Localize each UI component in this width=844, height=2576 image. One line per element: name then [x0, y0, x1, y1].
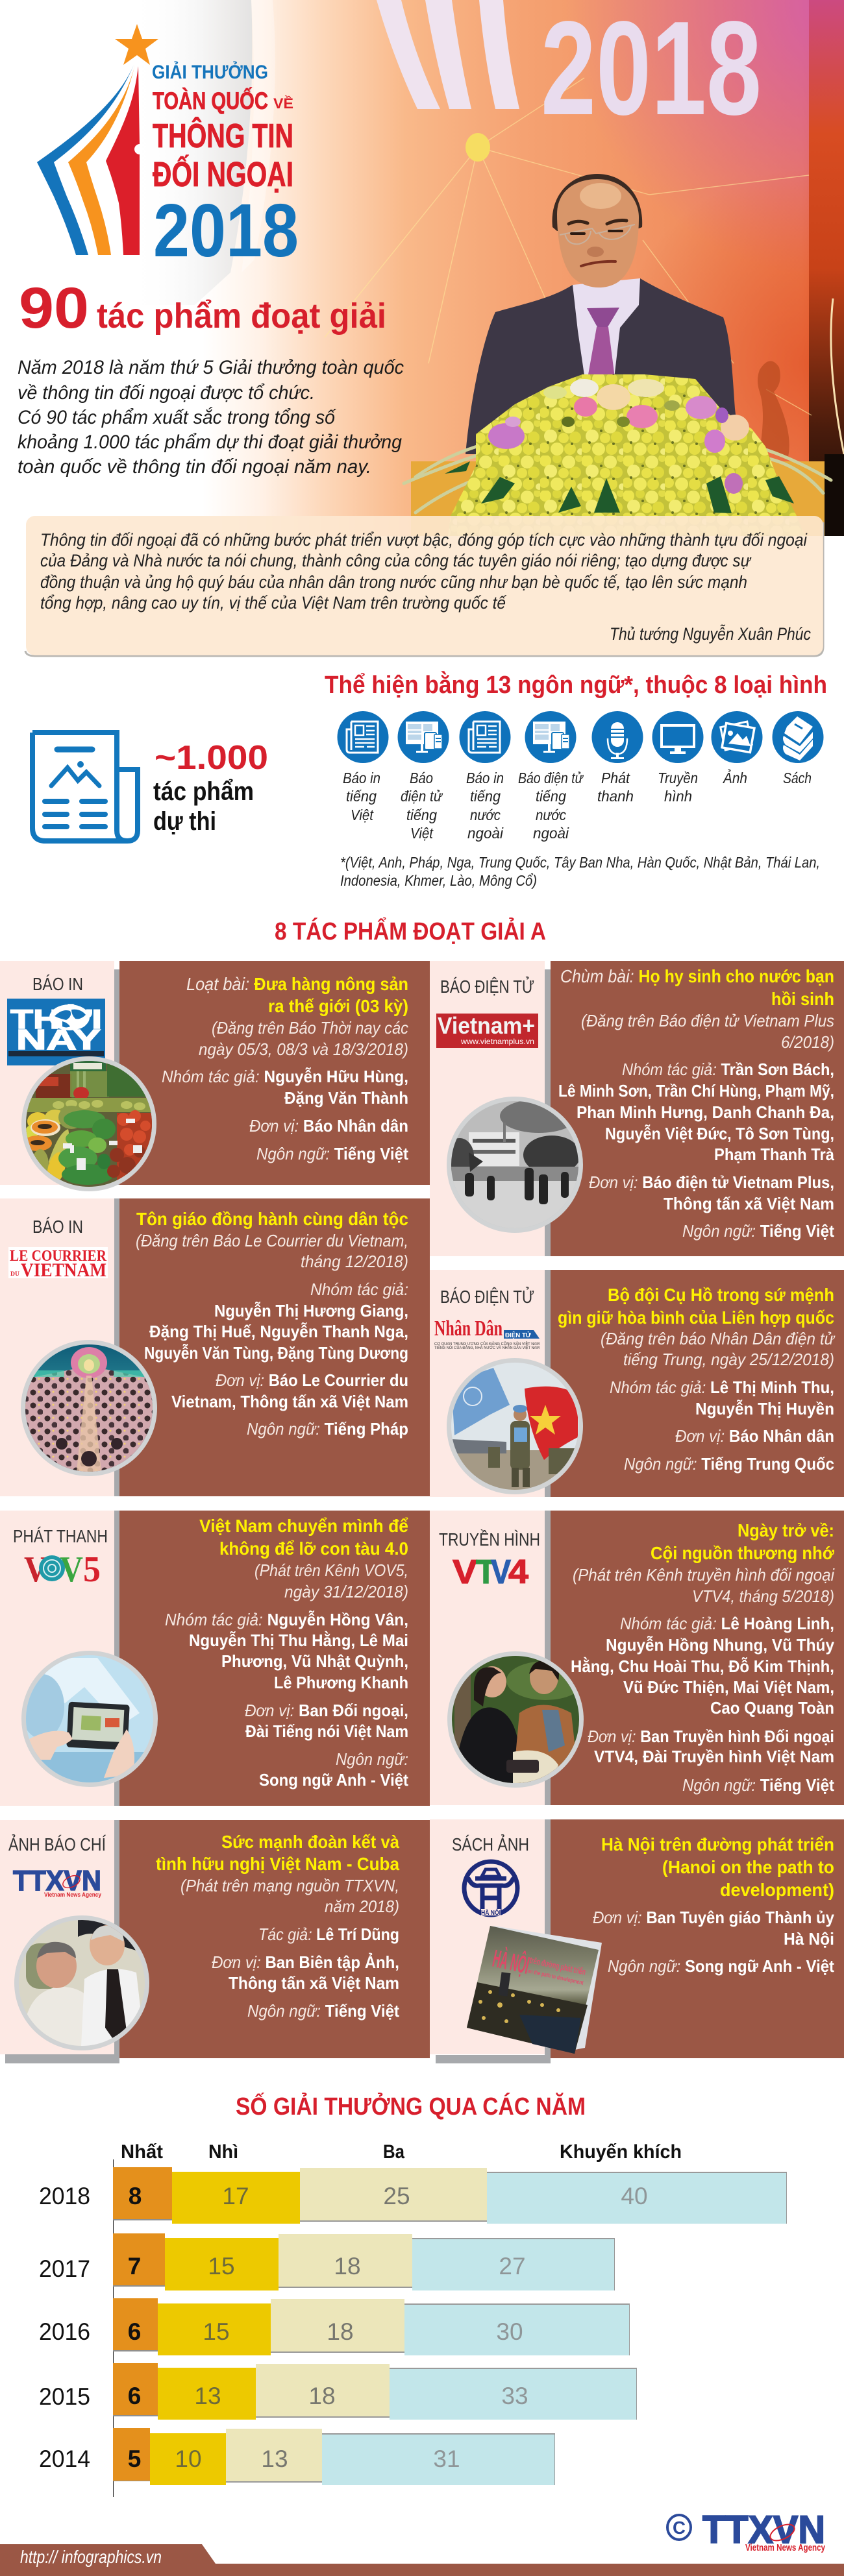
chart column headers: Nhì — [208, 2141, 238, 2163]
icon labels: tiếng — [346, 788, 377, 805]
publication note: ngày 05/3, 08/3 và 18/3/2018) — [199, 1039, 408, 1059]
logo: TTXVN: Vietnam News Agency — [44, 1891, 101, 1898]
logo: VOV5: V — [24, 1549, 47, 1590]
logo: Vietnam Plus: www.vietnamplus.vn — [460, 1037, 534, 1046]
row: 2014: 13 — [261, 2446, 288, 2472]
unit — [589, 1173, 834, 1213]
stat: about 1000 entries — [153, 739, 268, 836]
headline: 90 works: tác phẩm đoạt giải — [97, 297, 386, 335]
row: 2016: 2016 — [39, 2318, 90, 2345]
category label: TRUYỀN HÌNH — [439, 1529, 540, 1549]
row: 2014 — [39, 2428, 555, 2485]
logo: Thoi Nay — [7, 999, 105, 1065]
heading: Loạt bài: Đưa hàng nông sản — [186, 974, 408, 994]
logo: VOV5: V — [60, 1549, 83, 1590]
icon row: media types — [338, 711, 823, 763]
publication note — [180, 1876, 399, 1916]
publication note: (Phát trên mạng nguồn TTXVN, — [180, 1876, 399, 1895]
photo: tablet and robot arm — [20, 1651, 158, 1787]
icon: microphone — [592, 711, 643, 763]
authors: Phương, Vũ Nhật Quỳnh, — [221, 1651, 408, 1671]
authors — [610, 1378, 834, 1418]
row: 2016 — [39, 2298, 630, 2355]
logo title text: TOÀN QUỐC — [153, 87, 268, 114]
category label: BÁO ĐIỆN TỬ — [440, 976, 534, 997]
publication note: 6/2018) — [781, 1032, 834, 1052]
icon: books — [773, 711, 823, 763]
authors — [165, 1610, 408, 1692]
photo: two leaders — [14, 1915, 149, 2050]
row: 2017: 7 — [128, 2253, 141, 2279]
icon: online newspaper — [397, 711, 449, 763]
authors: Nguyễn Thị Hương Giang, — [214, 1301, 408, 1320]
unit — [212, 1952, 399, 1993]
category label: BÁO IN — [32, 1217, 83, 1237]
language — [259, 1749, 408, 1790]
photo: television interview — [447, 1651, 584, 1788]
publication note — [136, 1231, 408, 1271]
publication note — [199, 1018, 408, 1059]
icon labels: Việt — [351, 807, 374, 823]
icon labels: Phát — [601, 770, 630, 786]
icon labels: Báo — [410, 770, 433, 786]
icon labels: thanh — [597, 788, 634, 805]
publication note: năm 2018) — [325, 1897, 399, 1916]
icon: star — [115, 24, 158, 65]
logo: VTV4: V — [453, 1553, 477, 1591]
icon: print newspaper — [338, 711, 388, 763]
image: book cover — [467, 1926, 602, 2054]
icon labels: Sách — [783, 770, 812, 786]
quote text — [40, 530, 808, 613]
publication note — [254, 1561, 408, 1601]
icon: photos — [712, 711, 762, 763]
intro paragraph: khoảng 1.000 tác phẩm dự thi đoạt giải thưởng — [18, 431, 402, 453]
unit: VTV4, Đài Truyền hình Việt Nam — [594, 1747, 834, 1766]
heading: Ngày trở về: — [738, 1520, 834, 1540]
publication note: ngày 31/12/2018) — [284, 1582, 408, 1601]
logo: VOV5 — [24, 1549, 101, 1590]
logo: Nhan Dan: ĐIỆN TỬ — [505, 1331, 532, 1339]
language: Ngôn ngữ: Tiếng Việt — [256, 1144, 408, 1163]
category label: SÁCH ẢNH — [452, 1834, 529, 1854]
logo: Vietnam Plus: Vietnam+ — [438, 1012, 535, 1039]
chart column headers: Khuyến khích — [560, 2141, 682, 2163]
icon: newspaper — [32, 733, 138, 841]
panel: television, VTV4 — [430, 1511, 844, 1805]
authors: Đặng Văn Thành — [284, 1088, 408, 1108]
icon labels: Báo in — [466, 770, 504, 786]
logo title text: 2018 — [153, 188, 299, 273]
panel: online, Vietnam Plus — [430, 961, 844, 1256]
authors: Nguyễn Thị Huyền — [695, 1399, 834, 1418]
icon labels — [343, 768, 812, 842]
logo: Le Courrier du Vietnam — [8, 1247, 108, 1281]
panel: photo book, Hanoi — [430, 1819, 844, 2063]
footer logo: TTXVN: TTXVN — [702, 2508, 825, 2551]
unit: Thông tấn xã Việt Nam — [664, 1194, 834, 1213]
authors: Nhóm tác giả: Nguyễn Hữu Hùng, — [162, 1067, 408, 1086]
panel: press photo, TTXVN — [0, 1820, 430, 2063]
headline: 90 works — [19, 275, 386, 340]
publication note: VTV4, tháng 5/2018) — [692, 1586, 834, 1606]
category label: BÁO IN — [32, 974, 83, 994]
unit: Đơn vị: Báo Nhân dân — [249, 1116, 408, 1136]
panel: print, Thoi Nay — [0, 961, 430, 1191]
icon labels: Truyền — [658, 770, 698, 786]
unit: Đài Tiếng nói Việt Nam — [245, 1721, 408, 1741]
row: 2014: 31 — [433, 2446, 460, 2472]
authors: Đặng Thị Huế, Nguyễn Thanh Nga, — [149, 1322, 408, 1341]
logo: TTXVN: TTXVN — [13, 1865, 101, 1897]
stat: about 1000 entries: tác phẩm — [153, 777, 254, 806]
unit: Vietnam, Thông tấn xã Việt Nam — [171, 1392, 408, 1411]
heading: Việt Nam chuyển mình để — [199, 1516, 408, 1536]
language: Ngôn ngữ: Tiếng Việt — [682, 1775, 834, 1795]
authors: Nhóm tác giả: Lê Thị Minh Thu, — [610, 1378, 834, 1397]
footer url: http:// infographics.vn — [20, 2547, 162, 2567]
row: 2014: 10 — [175, 2446, 202, 2472]
chart title: SỐ GIẢI THƯỞNG QUA CÁC NĂM — [236, 2091, 586, 2120]
row: 2016: 15 — [203, 2318, 230, 2345]
unit: Đơn vị: Ban Đối ngoại, — [245, 1701, 408, 1720]
panel: print, Le Courrier — [0, 1198, 430, 1496]
icon labels: nước — [470, 807, 501, 823]
authors — [558, 1060, 834, 1164]
authors: Lê Phương Khanh — [274, 1673, 408, 1692]
publication note: (Đăng trên báo Nhân Dân điện tử — [601, 1329, 835, 1348]
publication note — [581, 1011, 834, 1052]
logo: Le Courrier du Vietnam: DU — [10, 1270, 20, 1277]
publication note: (Đăng trên Báo Thời nay các — [212, 1018, 408, 1038]
icon labels: tiếng — [406, 807, 437, 823]
unit: Đơn vị: Báo Le Courrier du — [216, 1370, 408, 1390]
category label: BÁO ĐIỆN TỬ — [440, 1286, 534, 1307]
chart column headers — [121, 2141, 682, 2163]
row: 2015 — [39, 2363, 637, 2420]
row: 2015: 18 — [308, 2383, 336, 2409]
row: 2018: 17 — [222, 2183, 249, 2209]
icon: television — [652, 711, 704, 763]
icon labels: ngoài — [467, 825, 504, 842]
publication note: tiếng Trung, ngày 25/12/2018) — [623, 1350, 834, 1369]
footnote: languages: Indonesia, Khmer, Lào, Mông Cổ) — [340, 872, 537, 889]
language: Ngôn ngữ: Tiếng Pháp — [247, 1419, 408, 1439]
heading: Sức mạnh đoàn kết và — [221, 1832, 399, 1852]
logo: VOV5: 5 — [83, 1549, 101, 1590]
headline: 90 works: 90 — [19, 275, 89, 340]
language: Ngôn ngữ: Tiếng Việt — [682, 1221, 834, 1241]
unit: Thông tấn xã Việt Nam — [229, 1973, 399, 1993]
chart column headers: Nhất — [121, 2141, 163, 2163]
icon: print foreign newspaper — [460, 711, 510, 763]
stat: about 1000 entries: ~1.000 — [155, 739, 268, 777]
row: 2018 — [39, 2167, 787, 2224]
logo title text: THÔNG TIN — [153, 117, 293, 155]
icon labels: Ảnh — [722, 768, 747, 786]
quote panel — [25, 516, 823, 656]
heading: Tôn giáo đồng hành cùng dân tộc — [136, 1209, 408, 1229]
row: 2015: 6 — [128, 2383, 141, 2409]
panel: radio, VOV5 — [0, 1511, 430, 1806]
logo: Le Courrier du Vietnam: VIETNAM — [21, 1259, 106, 1281]
unit — [593, 1908, 834, 1949]
icon labels: Báo điện tử — [518, 770, 584, 786]
category label: PHÁT THANH — [13, 1526, 108, 1546]
footer bar — [0, 2544, 844, 2576]
authors: Nhóm tác giả: Nguyễn Hồng Vân, — [165, 1610, 408, 1629]
row: 2017: 27 — [499, 2253, 526, 2279]
bar chart: awards by year — [39, 2141, 787, 2497]
logo: Nhan Dan: Nhân Dân — [434, 1317, 503, 1341]
authors: Nguyễn Hồng Nhung, Vũ Thúy — [606, 1635, 835, 1655]
row: 2017: 2017 — [39, 2255, 90, 2282]
image: book cover: on the path to development — [527, 1967, 584, 1986]
photo: fruit market — [21, 1056, 156, 1191]
unit: Đơn vị: Báo Nhân dân — [675, 1426, 834, 1446]
heading: Hà Nội trên đường phát triển — [601, 1834, 834, 1854]
icon labels: tiếng — [536, 788, 566, 805]
row: 2018: 25 — [383, 2183, 410, 2209]
icon: online foreign newspaper — [525, 711, 577, 763]
authors: Nguyễn Thị Thu Hằng, Lê Mai — [189, 1631, 408, 1650]
unit: Đơn vị: Ban Biên tập Ảnh, — [212, 1952, 399, 1972]
logo: VTV4: 4 — [508, 1553, 528, 1591]
icon labels: hình — [664, 788, 692, 805]
icon labels: Báo in — [343, 770, 380, 786]
icon: pen nib stripes — [37, 65, 140, 255]
image: book cover: trên đường phát triển — [528, 1954, 587, 1977]
logo: Hanoi — [464, 1862, 517, 1917]
row: 2018: 8 — [129, 2183, 142, 2209]
photo: soldiers in battle — [445, 1097, 583, 1233]
logo — [37, 24, 299, 273]
logo: Thoi Nay: NAY — [16, 1024, 101, 1056]
panel: online, Nhan Dan — [430, 1270, 844, 1497]
logo: Nhan Dan: TIẾNG NÓI CỦA ĐẢNG, NHÀ NƯỚC VÀ NHÂN DÂN VIỆT NAM — [434, 1345, 540, 1350]
logo: Nhan Dan — [434, 1317, 540, 1350]
chart column headers: Ba — [383, 2141, 404, 2163]
row: 2016: 18 — [327, 2318, 354, 2345]
row: 2015: 33 — [501, 2383, 528, 2409]
logo: VTV4: V — [491, 1553, 511, 1591]
row: 2016: 30 — [496, 2318, 523, 2345]
logo title text: GIẢI THƯỞNG — [152, 61, 268, 83]
publication note: (Phát trên Kênh VOV5, — [254, 1561, 408, 1580]
panel: online, Vietnam Plus: hồi sinh — [771, 989, 834, 1009]
intro paragraph: về thông tin đối ngoại được tổ chức. — [18, 382, 315, 404]
authors: Nhóm tác giả: — [310, 1280, 408, 1299]
unit — [171, 1370, 408, 1411]
row: 2014: 5 — [128, 2446, 141, 2472]
icon labels: ngoài — [533, 825, 569, 842]
publication note — [601, 1329, 835, 1369]
authors: Cao Quang Toàn — [710, 1698, 834, 1718]
row: 2014: 2014 — [39, 2446, 90, 2472]
panel: print, Thoi Nay: ra thế giới (03 kỳ) — [268, 996, 408, 1016]
row: 2017: 18 — [334, 2253, 361, 2279]
icon labels: tiếng — [470, 788, 501, 805]
quote attribution: Thủ tướng Nguyễn Xuân Phúc — [610, 624, 811, 644]
authors: Nhóm tác giả: Lê Hoàng Linh, — [620, 1614, 834, 1633]
category label: ẢNH BÁO CHÍ — [8, 1834, 106, 1854]
logo title text: ĐỐI NGOẠI — [153, 155, 293, 194]
language: Ngôn ngữ: Tiếng Việt — [247, 2001, 399, 2021]
language: Ngôn ngữ: Song ngữ Anh - Việt — [608, 1956, 834, 1976]
unit: Đơn vị: Ban Tuyên giáo Thành ủy — [593, 1908, 834, 1927]
quote text: đồng thuận và ủng hộ quý báu của nhân dân trong nước cũng như bạn bè quốc tế, tạo lên sức mạnh — [40, 572, 747, 592]
logo: Hanoi: HÀ NỘI — [481, 1908, 501, 1917]
logo: Le Courrier du Vietnam: LE COURRIER — [10, 1248, 107, 1265]
row: 2015: 2015 — [39, 2383, 90, 2410]
icon labels: Việt — [410, 825, 434, 842]
logo: VTV4: T — [476, 1553, 496, 1591]
authors — [571, 1614, 835, 1718]
unit: Hà Nội — [784, 1929, 834, 1949]
unit — [588, 1727, 834, 1766]
authors: Nhóm tác giả: Trần Sơn Bách, — [622, 1060, 834, 1079]
row: 2018: 40 — [621, 2183, 648, 2209]
logo: Thoi Nay: THỜI — [10, 1003, 102, 1034]
logo title text: VỀ — [273, 95, 293, 112]
row: 2016: 6 — [128, 2318, 141, 2345]
heading: 8 A-prize works: 8 TÁC PHẨM ĐOẠT GIẢI A — [275, 916, 546, 945]
logo: VTV4 — [453, 1553, 528, 1591]
authors — [162, 1067, 408, 1108]
photo: religious gathering — [21, 1340, 157, 1476]
footnote: languages — [340, 854, 820, 889]
row: 2017 — [39, 2233, 615, 2290]
icon labels: điện tử — [401, 788, 443, 805]
heading: (Hanoi on the path to — [662, 1857, 834, 1877]
author: Tác giả: Lê Trí Dũng — [258, 1925, 399, 1944]
stat: about 1000 entries: dự thi — [153, 807, 216, 836]
authors: Phạm Thanh Trà — [714, 1145, 834, 1164]
image: book cover: HÀ NỘI — [490, 1943, 532, 1980]
intro paragraph: toàn quốc về thông tin đối ngoại năm nay. — [18, 456, 371, 478]
authors — [144, 1280, 408, 1363]
authors: Phan Minh Hưng, Danh Chanh Đa, — [577, 1102, 834, 1122]
intro paragraph: Có 90 tác phẩm xuất sắc trong tổng số — [18, 407, 336, 428]
publication note — [573, 1565, 835, 1606]
row: 2017: 15 — [208, 2253, 235, 2279]
row: 2018: 2018 — [39, 2183, 90, 2209]
authors: Nguyễn Văn Tùng, Đặng Tùng Dương — [144, 1343, 408, 1363]
panel: press photo, TTXVN: tình hữu nghị Việt Nam - Cuba — [156, 1854, 399, 1874]
row: 2015: 13 — [194, 2383, 221, 2409]
intro paragraph: Năm 2018 là năm thứ 5 Giải thưởng toàn quốc — [18, 357, 404, 378]
unit — [245, 1701, 408, 1741]
quote text: tổng hợp, nâng cao uy tín, vị thế của Việt Nam trên trường quốc tế — [40, 593, 507, 613]
photo: peacekeepers with flags — [447, 1358, 583, 1494]
icon labels: nước — [536, 807, 566, 823]
publication note: (Đăng trên Báo Le Courrier du Vietnam, — [136, 1231, 408, 1250]
language: Ngôn ngữ: Tiếng Trung Quốc — [624, 1454, 834, 1474]
language: Song ngữ Anh - Việt — [259, 1770, 408, 1790]
heading — [601, 1834, 834, 1900]
footer logo: TTXVN: C — [673, 2518, 686, 2538]
hero photo banner — [196, 0, 844, 536]
intro paragraph — [18, 357, 404, 478]
heading: development) — [720, 1880, 834, 1900]
quote text: của Đảng và Nhà nước ta nói chung, thành công của công tác tuyên giáo nói riêng; tạo dựng được sự — [40, 551, 752, 570]
logo title text — [152, 61, 299, 273]
unit: Đơn vị: Báo điện tử Vietnam Plus, — [589, 1173, 834, 1192]
logo: Nhan Dan: CƠ QUAN TRUNG ƯƠNG CỦA ĐẢNG CỘNG SẢN VIỆT NAM — [434, 1341, 540, 1346]
panel: radio, VOV5: không để lỡ con tàu 4.0 — [219, 1538, 408, 1559]
language: Ngôn ngữ: — [336, 1749, 408, 1769]
publication note: tháng 12/2018) — [301, 1252, 408, 1271]
